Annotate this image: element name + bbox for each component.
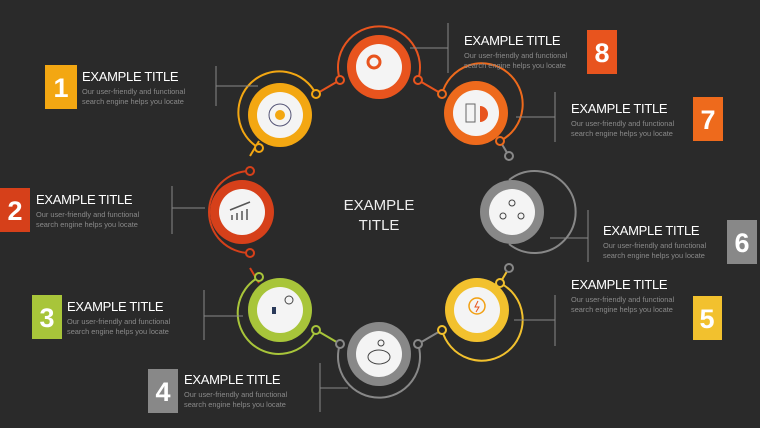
label 2: 2 <box>7 196 23 226</box>
label 7 <box>516 92 723 142</box>
center title: TITLE <box>359 217 399 234</box>
connector ring path <box>250 80 509 344</box>
node 1 <box>238 71 320 152</box>
node 6 <box>480 152 576 272</box>
node 2 <box>209 167 274 257</box>
label 2 <box>0 186 205 234</box>
label 6: search engine helps you locate <box>603 251 705 260</box>
label 8 <box>410 23 617 74</box>
label 4: 4 <box>155 377 171 407</box>
label 6: 6 <box>734 228 750 258</box>
label 6 <box>550 210 757 264</box>
label 6: EXAMPLE TITLE <box>603 223 700 238</box>
label 5: Our user-friendly and functional <box>571 295 674 304</box>
label 2: search engine helps you locate <box>36 220 138 229</box>
label 3: 3 <box>39 303 55 333</box>
label 1: search engine helps you locate <box>82 97 184 106</box>
label 5 <box>514 277 722 346</box>
node 5 <box>438 278 523 361</box>
label 7: EXAMPLE TITLE <box>571 101 668 116</box>
label 8: search engine helps you locate <box>464 61 566 70</box>
label 3: search engine helps you locate <box>67 327 169 336</box>
center title: EXAMPLE <box>344 197 414 214</box>
label 1: 1 <box>53 73 69 103</box>
label 2: EXAMPLE TITLE <box>36 192 133 207</box>
label 1 <box>45 65 258 109</box>
label 7: Our user-friendly and functional <box>571 119 674 128</box>
node 7 <box>438 63 523 145</box>
node 3 <box>238 273 320 354</box>
label 8: EXAMPLE TITLE <box>464 33 561 48</box>
label 6: Our user-friendly and functional <box>603 241 706 250</box>
label 3: Our user-friendly and functional <box>67 317 170 326</box>
label 3 <box>32 290 243 340</box>
label 5: 5 <box>699 304 715 334</box>
node 8 <box>336 26 422 99</box>
center title <box>344 197 414 234</box>
label 5: search engine helps you locate <box>571 305 673 314</box>
label 8: Our user-friendly and functional <box>464 51 567 60</box>
label 8: 8 <box>594 38 610 68</box>
label 5: EXAMPLE TITLE <box>571 277 668 292</box>
label 2: Our user-friendly and functional <box>36 210 139 219</box>
label 4: Our user-friendly and functional <box>184 390 287 399</box>
label 4: search engine helps you locate <box>184 400 286 409</box>
label 7: 7 <box>700 105 716 135</box>
label 1: Our user-friendly and functional <box>82 87 185 96</box>
label 4 <box>148 363 348 413</box>
label 4: EXAMPLE TITLE <box>184 372 281 387</box>
node 4 <box>336 322 422 398</box>
label 1: EXAMPLE TITLE <box>82 69 179 84</box>
label 7: search engine helps you locate <box>571 129 673 138</box>
label 3: EXAMPLE TITLE <box>67 299 164 314</box>
